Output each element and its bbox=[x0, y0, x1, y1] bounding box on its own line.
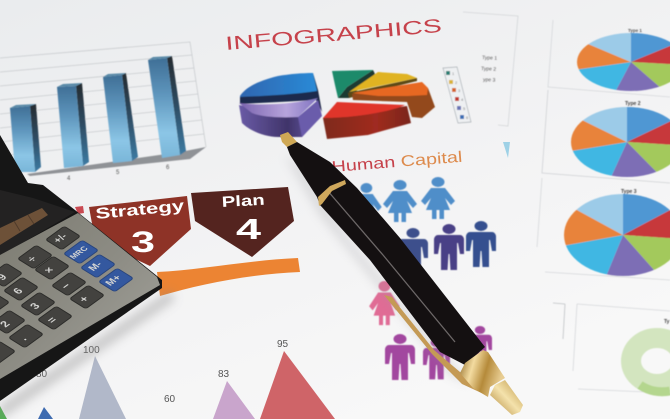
3D pie chart bbox=[239, 70, 435, 139]
keypad: +/- bbox=[51, 232, 70, 245]
bar 6 bbox=[148, 56, 186, 158]
orange curved band bbox=[157, 258, 300, 296]
section heading: Human Capital: Human Capital bbox=[331, 149, 463, 176]
arrow banner: Plan 4 bbox=[191, 187, 294, 257]
right panels of pie charts bbox=[513, 4, 670, 393]
purple men bbox=[385, 326, 492, 380]
sheet outline bbox=[463, 12, 518, 126]
chart grid bbox=[0, 42, 206, 156]
pen barrel bbox=[287, 142, 485, 365]
navy men row bbox=[398, 221, 496, 274]
triangle: green bbox=[0, 406, 7, 419]
keypad: + bbox=[77, 294, 92, 304]
value labels: 60 bbox=[164, 394, 176, 405]
pen highlight bbox=[327, 190, 455, 342]
keypad bbox=[0, 226, 133, 365]
pie slice: purple bbox=[239, 98, 322, 137]
axis labels bbox=[67, 165, 170, 182]
axis labels: 6 bbox=[166, 165, 170, 171]
chart floor bbox=[27, 147, 206, 176]
type labels bbox=[481, 55, 497, 84]
legend box: 1 bbox=[452, 71, 455, 76]
keypad: 6 bbox=[11, 286, 26, 296]
value labels: 83 bbox=[218, 369, 230, 380]
pie slice: yellow bbox=[348, 72, 417, 98]
keypad: 3 bbox=[28, 301, 43, 311]
cyan chart fragment bbox=[503, 142, 510, 158]
pen nib bbox=[490, 380, 523, 415]
triangle: 95 bbox=[260, 351, 335, 419]
pie slice: blue bbox=[240, 73, 322, 112]
value labels: 80 bbox=[36, 369, 48, 380]
title: INFOGRAPHICS bbox=[225, 16, 443, 55]
axis labels: 5 bbox=[116, 170, 120, 176]
keypad: × bbox=[42, 265, 57, 275]
panel: bar chart bbox=[0, 42, 206, 182]
legend box: 6 bbox=[466, 115, 469, 120]
panel: mini legend sheet bbox=[443, 12, 518, 126]
calculator body bbox=[0, 135, 162, 401]
axis labels: 4 bbox=[67, 176, 71, 182]
calculator display bbox=[0, 208, 48, 245]
arrow banner: Plan 4: Plan bbox=[221, 192, 265, 211]
pen tip bbox=[280, 132, 297, 147]
panel: Type 3 pie: Type 3 bbox=[621, 189, 637, 195]
pie slice: red bbox=[323, 102, 411, 139]
legend box: 2 bbox=[455, 80, 458, 85]
triangle: blue bbox=[38, 407, 53, 419]
calculator top edge bbox=[0, 190, 75, 256]
people pictograms bbox=[351, 177, 496, 380]
pink woman bbox=[369, 281, 400, 325]
panel: Type 2 pie: Type 2 bbox=[625, 101, 641, 107]
triangle chart bbox=[0, 339, 335, 419]
arrow banner: Strategy 3: Strategy bbox=[95, 197, 186, 223]
bar 4 bbox=[57, 83, 89, 168]
legend box bbox=[443, 67, 471, 123]
pen ring bbox=[318, 180, 346, 206]
bar 3 bbox=[10, 104, 41, 172]
panel: donut chart: Ty bbox=[664, 319, 670, 325]
panel: Type 3 pie bbox=[513, 153, 670, 315]
arrow banner: Strategy 3: 3 bbox=[131, 226, 155, 259]
calculator face bbox=[0, 213, 160, 379]
calculator bbox=[0, 135, 175, 419]
legend box: 5 bbox=[463, 106, 466, 111]
pen clip bbox=[384, 295, 488, 396]
keypad: MRC bbox=[68, 245, 90, 260]
arrow banner: Strategy 3 bbox=[75, 196, 191, 266]
pen bbox=[280, 132, 523, 415]
keypad: = bbox=[45, 315, 60, 325]
blue women row bbox=[351, 177, 455, 225]
keypad: M- bbox=[86, 260, 105, 273]
type labels: ype 3 bbox=[483, 77, 496, 84]
pen gold cone bbox=[460, 350, 505, 397]
panel: Type 1 pie bbox=[531, 4, 670, 119]
keypad: M+ bbox=[103, 274, 124, 288]
legend box: 4 bbox=[461, 97, 464, 102]
bar 5 bbox=[103, 73, 138, 163]
legend box: 3 bbox=[458, 88, 461, 93]
value labels: 95 bbox=[277, 339, 289, 350]
pie slice: orange bbox=[352, 82, 435, 118]
value labels bbox=[36, 339, 289, 405]
pie slice: green bbox=[332, 70, 375, 98]
triangle: 83 bbox=[213, 381, 255, 419]
calculator shadow bbox=[0, 290, 175, 419]
keypad: − bbox=[59, 281, 74, 291]
arrow banner: Plan 4: 4 bbox=[236, 214, 261, 246]
keypad: . bbox=[17, 334, 30, 342]
panel: Type 1 pie: Type 1 bbox=[628, 28, 642, 33]
type labels: Type 2 bbox=[481, 66, 496, 73]
triangle: 100 bbox=[79, 356, 126, 419]
pen shadow bbox=[285, 155, 470, 385]
panel: donut chart bbox=[553, 303, 670, 393]
keypad: ÷ bbox=[25, 254, 40, 264]
value labels: 100 bbox=[83, 345, 100, 356]
panel: Type 2 pie bbox=[523, 72, 670, 211]
type labels: Type 1 bbox=[482, 55, 497, 62]
